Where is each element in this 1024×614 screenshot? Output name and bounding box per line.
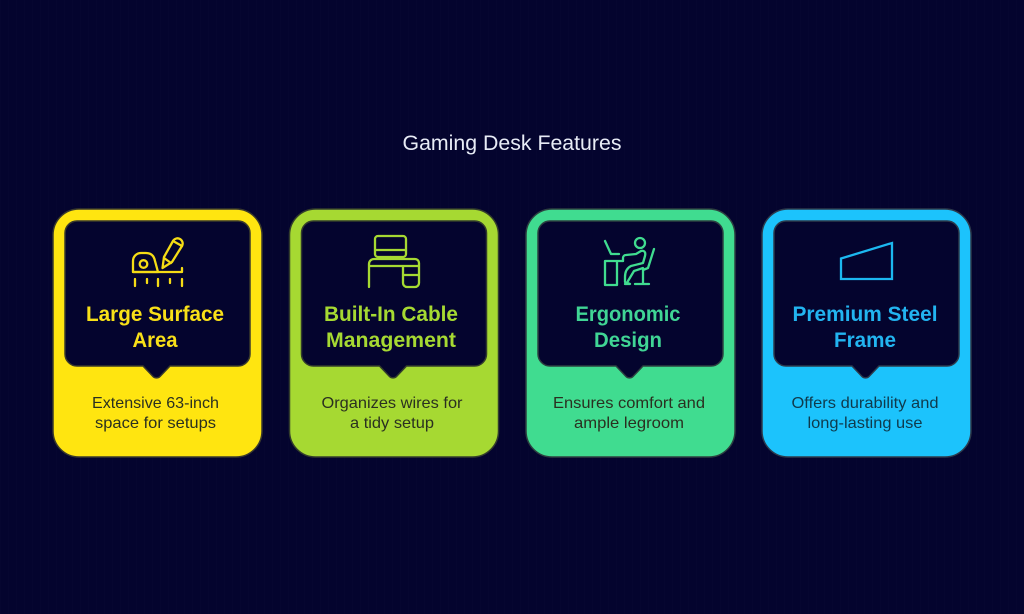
panel: large surface area: Area bbox=[132, 329, 178, 352]
icon: steel frame bbox=[841, 243, 892, 279]
icon: desk with monitor bbox=[369, 236, 419, 287]
panel: large surface area: space for setups bbox=[95, 415, 216, 432]
panel: large surface area bbox=[53, 209, 262, 457]
heading: Ergonomic bbox=[576, 303, 681, 326]
panel: premium steel frame: long-lasting use bbox=[808, 415, 923, 432]
panel: built-in cable management: Management bbox=[326, 329, 456, 352]
panel: ergonomic design bbox=[526, 209, 735, 457]
description: Organizes wires for bbox=[322, 395, 463, 412]
panel: premium steel frame bbox=[762, 209, 971, 457]
heading: Premium Steel bbox=[792, 303, 938, 326]
callout box bbox=[774, 221, 959, 378]
panel: premium steel frame: Frame bbox=[834, 329, 896, 352]
panel: built-in cable management bbox=[290, 209, 498, 457]
callout box bbox=[302, 221, 486, 378]
heading: Built-In Cable bbox=[324, 303, 458, 326]
description: Offers durability and bbox=[792, 395, 938, 412]
description: Ensures comfort and bbox=[553, 395, 705, 412]
icon: tape measure and pencil bbox=[133, 238, 183, 286]
panel: built-in cable management: a tidy setup bbox=[350, 415, 434, 432]
callout box bbox=[65, 221, 250, 378]
panel: ergonomic design: Design bbox=[594, 329, 662, 352]
heading: Large Surface bbox=[86, 303, 224, 326]
title: Gaming Desk Features bbox=[402, 131, 622, 155]
icon: person at desk bbox=[605, 238, 654, 285]
description: Extensive 63-inch bbox=[92, 395, 219, 412]
callout box bbox=[538, 221, 723, 378]
panel: ergonomic design: ample legroom bbox=[574, 415, 684, 432]
